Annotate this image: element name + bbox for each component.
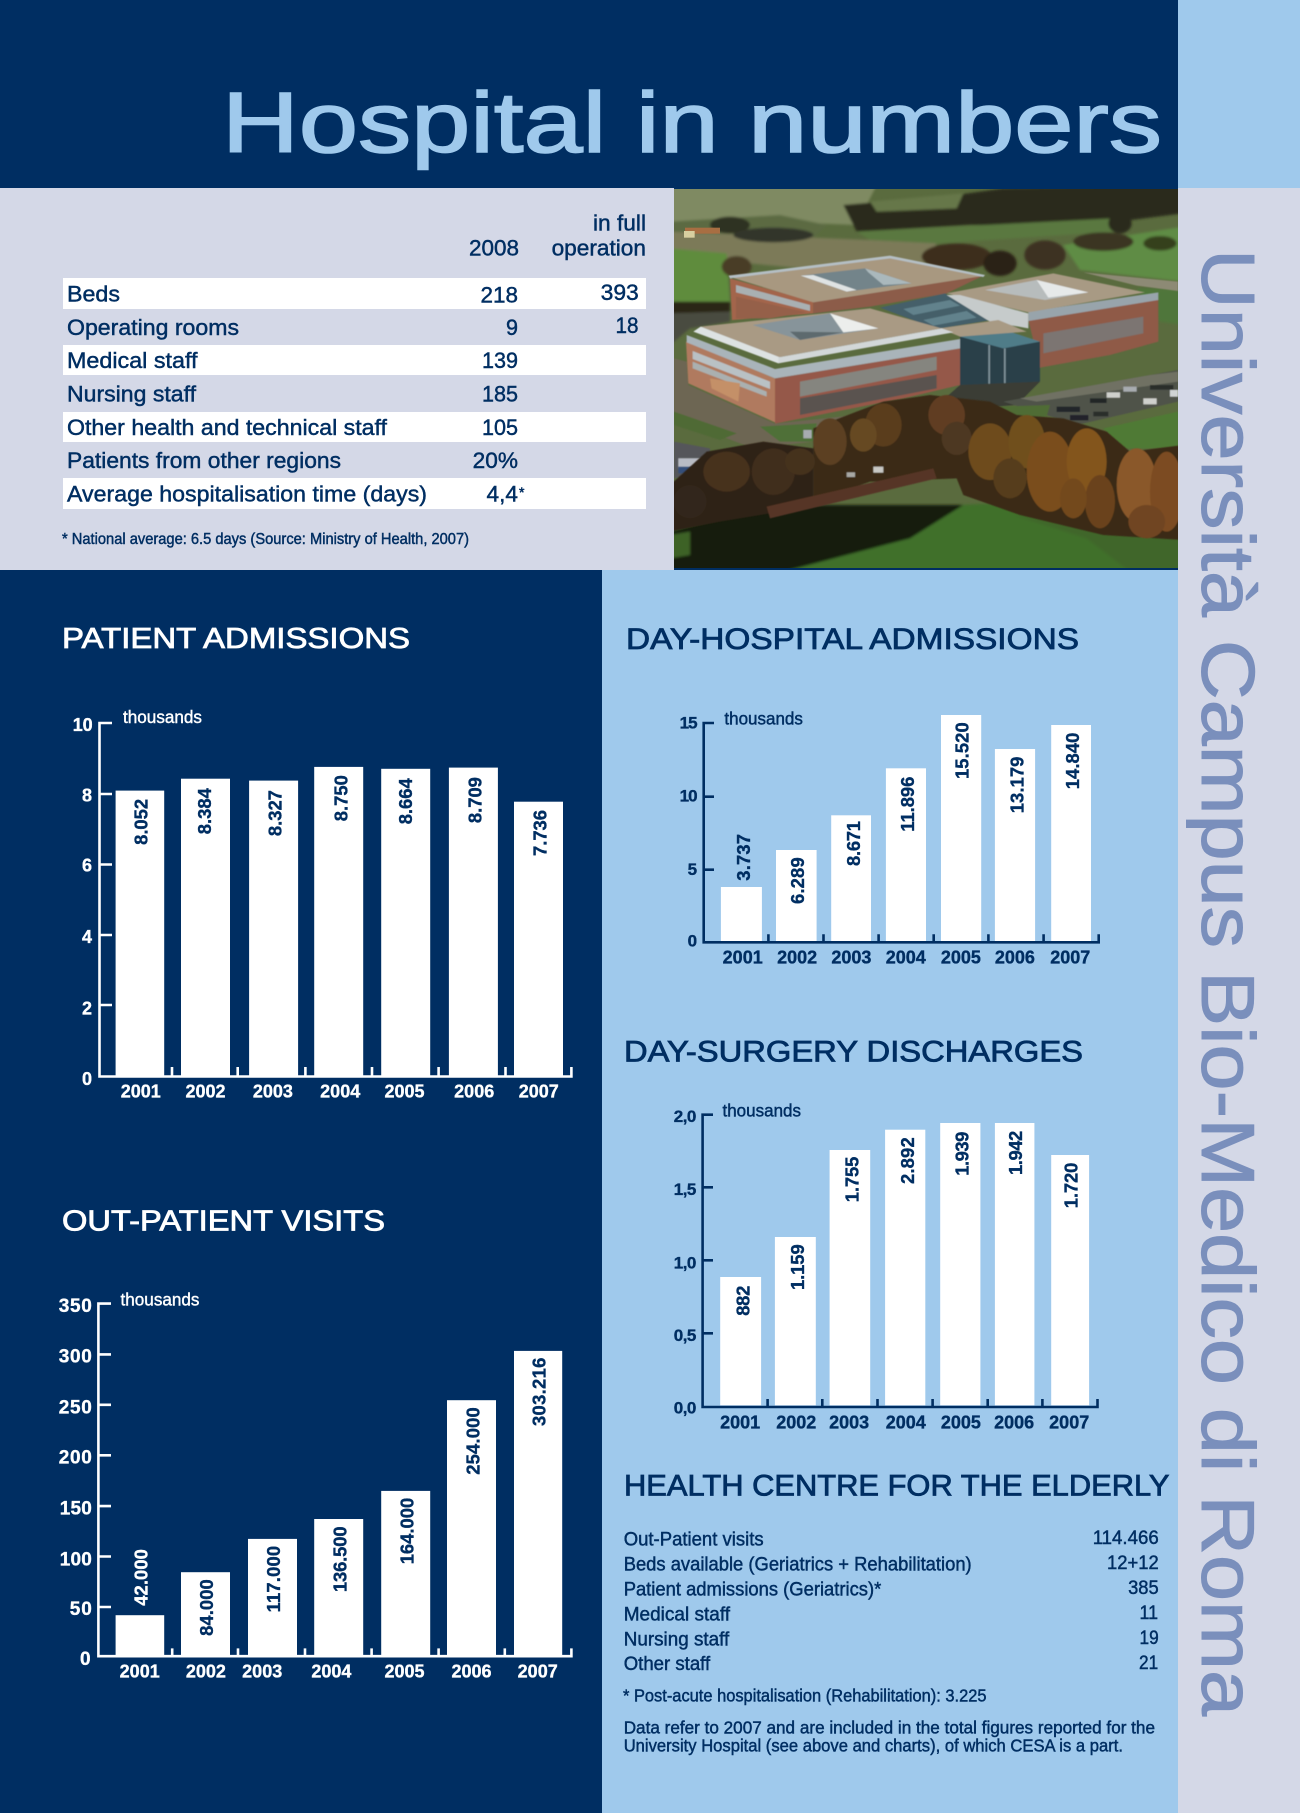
y axis labels: 2,0 (674, 1107, 696, 1126)
panel: header band (0, 0, 1178, 188)
bar values: 8.384 (194, 787, 215, 834)
bar values: 164.000 (396, 1498, 417, 1564)
row: Nursing staff: Nursing staff (67, 382, 197, 407)
y axis labels: 350 (59, 1296, 92, 1317)
bars (720, 1123, 1089, 1405)
elderly centre list: Other staff (624, 1653, 711, 1675)
y axis labels: 50 (70, 1599, 92, 1620)
table column headers: in full (593, 211, 646, 236)
unit label: thousands (120, 1290, 200, 1310)
y axis labels: 0 (688, 932, 697, 951)
row: Nursing staff: 185 (482, 382, 518, 407)
x axis labels (121, 1082, 559, 1102)
x axis labels: 2001 (121, 1082, 161, 1102)
row: Beds (67, 280, 639, 308)
panel: right lavender strip (1178, 188, 1300, 1813)
elderly centre list: Out-Patient visits (624, 1529, 764, 1551)
bar values: 84.000 (196, 1579, 217, 1636)
bar values: 8.327 (264, 790, 285, 836)
y axis labels: 1,5 (674, 1180, 696, 1199)
chart: patient admissions (73, 707, 571, 1102)
bar values: 882 (732, 1286, 753, 1316)
x axis labels: 2002 (777, 947, 817, 967)
heading: day-hospital admissions: DAY-HOSPITAL ADMISSIONS (626, 623, 1079, 656)
bar values (130, 775, 551, 856)
unit label: thousands (123, 707, 202, 727)
x axis labels: 2003 (253, 1082, 293, 1102)
y axis labels: 6 (82, 856, 92, 876)
trees (670, 395, 1183, 540)
bar values: 8.052 (130, 799, 151, 845)
y axis labels: 2 (82, 998, 92, 1018)
vertical title: Università Campus Bio-Medico di Roma: Università Campus Bio-Medico di Roma (1186, 249, 1270, 1716)
photo: aerial view of the hospital (670, 185, 1183, 572)
elderly centre list: Beds available (Geriatrics + Rehabilitation) (624, 1554, 972, 1576)
elderly centre notes: University Hospital (see above and charts), of which CESA is a part. (624, 1736, 1123, 1756)
bar values: 11.896 (897, 777, 918, 832)
y axis labels: 10 (680, 787, 698, 806)
row: Other health and technical staff: 105 (482, 415, 518, 440)
panel: statistics table background (0, 188, 674, 570)
elderly centre list: 12+12 (1107, 1552, 1159, 1574)
y axis labels: 300 (59, 1347, 92, 1368)
row: Average hospitalisation time: 4,4 (486, 482, 518, 507)
x axis labels: 2004 (886, 1413, 926, 1433)
row: Operating rooms: 9 (506, 315, 518, 340)
y axis labels: 1,0 (674, 1253, 696, 1272)
table footnote: * National average: 6.5 days (Source: Ministry of Health, 2007) (62, 531, 469, 548)
x axis labels: 2001 (120, 1662, 160, 1682)
row: Medical staff: 139 (482, 348, 518, 373)
axes (100, 723, 571, 1076)
axes (98, 1304, 571, 1656)
chart: day-hospital admissions (680, 709, 1099, 967)
unit label: thousands (722, 1101, 801, 1121)
y axis labels: 10 (73, 715, 93, 735)
elderly centre list (624, 1527, 1159, 1675)
bar values (732, 1131, 1082, 1316)
title: Hospital in numbers (222, 76, 1162, 171)
bar values: 8.709 (464, 777, 485, 823)
axes (704, 723, 1099, 942)
x axis labels: 2007 (1049, 1413, 1089, 1433)
row: Average hospitalisation time: * (519, 484, 525, 500)
x axis labels: 2003 (831, 947, 871, 967)
bar values: 8.664 (395, 778, 416, 824)
y axis labels (680, 713, 698, 951)
x axis labels: 2003 (242, 1662, 282, 1682)
x axis labels (120, 1662, 558, 1682)
bars (721, 715, 1091, 941)
x axis labels: 2006 (451, 1662, 492, 1682)
elderly centre notes: Data refer to 2007 and are included in the total figures reported for the (624, 1717, 1155, 1737)
row: Medical staff (67, 348, 518, 373)
bar values (733, 722, 1083, 904)
row: Patients from other regions: Patients from other regions (67, 448, 341, 473)
y axis labels: 0,0 (674, 1398, 696, 1417)
heading: out-patient visits: OUT-PATIENT VISITS (62, 1206, 385, 1238)
elderly centre list: 385 (1128, 1577, 1159, 1599)
elderly centre list: Nursing staff (624, 1629, 730, 1651)
x axis labels: 2006 (454, 1082, 494, 1102)
elderly centre notes (623, 1686, 1155, 1756)
y axis labels: 0 (80, 1649, 91, 1670)
bar values: 117.000 (263, 1546, 284, 1612)
x axis labels: 2004 (320, 1082, 360, 1102)
x axis labels: 2004 (311, 1662, 351, 1682)
x axis labels: 2005 (384, 1662, 425, 1682)
axes (703, 1115, 1098, 1407)
chart: day-surgery discharges (674, 1101, 1098, 1433)
y axis labels (59, 1296, 92, 1670)
elderly centre list: 11 (1140, 1602, 1158, 1624)
elderly centre list: Patient admissions (Geriatrics)* (624, 1579, 882, 1601)
bar values: 136.500 (330, 1526, 351, 1592)
foreground lawn and shadow (674, 503, 1178, 568)
bar values: 1.720 (1061, 1163, 1082, 1208)
hospital building (674, 256, 1178, 478)
y axis labels: 100 (60, 1550, 92, 1570)
x axis labels: 2005 (941, 1413, 981, 1433)
bar values: 14.840 (1062, 733, 1083, 789)
statistics table (62, 211, 646, 548)
x axis labels: 2007 (1050, 947, 1090, 967)
x axis labels: 2002 (185, 1082, 226, 1102)
table column headers: 2008 (469, 236, 519, 261)
heading: health centre for the elderly: HEALTH CENTRE FOR THE ELDERLY (624, 1469, 1170, 1502)
heading: patient admissions: PATIENT ADMISSIONS (62, 623, 410, 655)
x axis labels: 2001 (720, 1413, 760, 1433)
row: Operating rooms (67, 313, 638, 340)
bar values: 2.892 (897, 1137, 918, 1184)
bar values: 3.737 (733, 834, 754, 881)
row: Patients from other regions: 20% (473, 448, 518, 473)
bar values: 303.216 (528, 1358, 549, 1426)
x axis labels: 2002 (186, 1662, 226, 1682)
x axis labels: 2001 (723, 947, 763, 967)
bars (116, 767, 563, 1076)
table column headers (469, 211, 646, 261)
elderly centre list: Medical staff (624, 1604, 731, 1626)
x axis labels: 2002 (776, 1413, 816, 1433)
bar values (130, 1358, 549, 1636)
row: Medical staff: Medical staff (67, 348, 198, 373)
y axis labels: 200 (59, 1448, 92, 1468)
x axis labels: 2005 (384, 1082, 425, 1102)
elderly centre list: 114.466 (1093, 1527, 1159, 1549)
bar values: 1.755 (842, 1157, 863, 1202)
row: Patients from other regions (67, 448, 518, 473)
elderly centre notes: * Post-acute hospitalisation (Rehabilitation): 3.225 (623, 1686, 986, 1706)
bar values: 7.736 (530, 810, 550, 856)
x axis labels: 2004 (886, 947, 926, 967)
bar values: 1.159 (787, 1244, 808, 1290)
y axis labels: 0 (82, 1069, 92, 1089)
x axis labels: 2006 (995, 947, 1035, 967)
bar values: 8.750 (330, 775, 352, 821)
row: Other health and technical staff (67, 415, 518, 440)
bar values: 42.000 (130, 1549, 151, 1606)
row: Operating rooms: 18 (616, 313, 638, 338)
row: Other health and technical staff: Other health and technical staff (67, 415, 388, 440)
panel: right light blue charts background (602, 570, 1178, 1813)
x axis labels: 2003 (829, 1413, 869, 1433)
chart: out-patient visits (59, 1290, 571, 1682)
y axis labels: 5 (688, 860, 697, 879)
row: Beds: 393 (601, 280, 639, 305)
unit label: thousands (724, 709, 803, 729)
row: Nursing staff (67, 382, 518, 407)
bar values: 6.289 (787, 857, 808, 904)
y axis labels: 15 (680, 713, 698, 732)
y axis labels (674, 1107, 696, 1417)
x axis labels: 2006 (994, 1413, 1034, 1433)
bar values: 15.520 (952, 722, 972, 779)
x axis labels (723, 947, 1090, 967)
row: Beds: Beds (67, 282, 120, 307)
elderly centre list: 21 (1139, 1652, 1158, 1674)
x axis labels: 2007 (518, 1662, 558, 1682)
table zebra rows (63, 278, 646, 509)
elderly centre list: 19 (1140, 1627, 1159, 1649)
y axis labels: 150 (60, 1499, 92, 1520)
bar values: 1.942 (1005, 1131, 1026, 1175)
y axis labels: 0,5 (674, 1326, 696, 1345)
landscape behind the hospital (670, 185, 1183, 345)
x axis labels: 2007 (519, 1082, 559, 1102)
row: Average hospitalisation time: Average hospitalisation time (days) (67, 482, 427, 507)
heading: day-surgery discharges: DAY-SURGERY DISCHARGES (624, 1036, 1083, 1069)
y axis labels: 4 (82, 927, 92, 947)
panel: top right light blue block (1178, 0, 1300, 188)
bar values: 1.939 (952, 1132, 972, 1176)
table column headers: operation (552, 236, 646, 261)
bar values: 254.000 (462, 1407, 484, 1475)
y axis labels: 8 (82, 786, 92, 806)
bars (116, 1351, 562, 1655)
bar values: 8.671 (843, 821, 864, 866)
y axis labels: 250 (59, 1397, 92, 1418)
x axis labels: 2005 (941, 947, 981, 967)
row: Operating rooms: Operating rooms (67, 315, 239, 340)
bar values: 13.179 (1006, 757, 1027, 813)
x axis labels (720, 1413, 1089, 1433)
panel: left dark charts background (0, 570, 602, 1813)
y axis labels (73, 715, 93, 1089)
row: Beds: 218 (480, 282, 518, 308)
